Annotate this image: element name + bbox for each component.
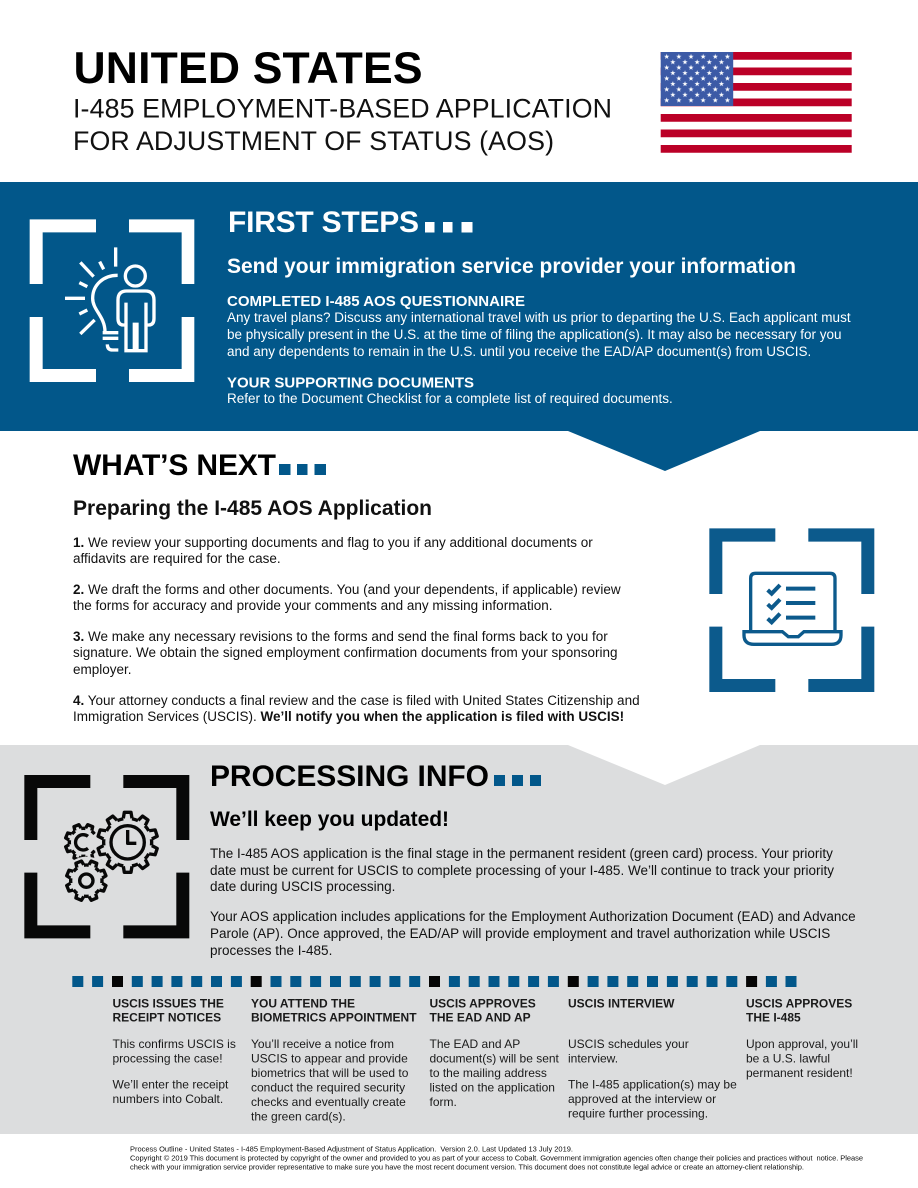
- text block: supporting documents: YOUR SUPPORTING DOCUMENTS: [227, 374, 474, 392]
- timeline step: EAD and AP approval: USCIS APPROVES: [430, 996, 536, 1010]
- timeline step: interview: [568, 996, 737, 1120]
- timeline step: biometrics appointment: biometrics that will be used to: [251, 1066, 409, 1080]
- timeline step: EAD and AP approval: form.: [430, 1095, 457, 1109]
- icon part: large clock gear: [94, 809, 161, 876]
- step 2: [73, 582, 621, 613]
- icon part: small upper gear: [65, 824, 101, 860]
- step 4: [73, 693, 640, 724]
- timeline step: interview: require further processing.: [568, 1106, 708, 1120]
- text block: questionnaire: Any travel plans? Discuss any international travel with us prior to departing the U.S. Each applicant must: [227, 310, 851, 325]
- timeline step: I-485 approval: [746, 996, 858, 1080]
- timeline step: receipt notices: This confirms USCIS is: [112, 1037, 236, 1051]
- timeline step: biometrics appointment: checks and eventually create: [251, 1095, 406, 1109]
- timeline step: interview: interview.: [568, 1052, 618, 1066]
- step 1: [73, 535, 593, 566]
- subtitle: I-485 EMPLOYMENT-BASED APPLICATION: [73, 94, 612, 124]
- step 4: 4. Your attorney conducts a final review and the case is filed with United States Citizenship and: [73, 693, 640, 708]
- footer disclaimer: check with your immigration service provider representative to make sure you have the most recent document version. This document does not constitute legal advice or create an attorney-client relationship.: [130, 1162, 804, 1172]
- timeline step: I-485 approval: Upon approval, you’ll: [746, 1037, 858, 1051]
- footer disclaimer: Process Outline - United States - I-485 Employment-Based Adjustment of Status Application. Version 2.0. Last Updated 13 July 2019.: [130, 1144, 573, 1154]
- step 4: Immigration Services (USCIS). We’ll notify you when the application is filed with USCIS!: [73, 709, 624, 724]
- panel: processing info: [0, 745, 918, 1134]
- icon: gears and clock: [24, 775, 189, 938]
- timeline step: receipt notices: RECEIPT NOTICES: [112, 1010, 221, 1024]
- step 2: the forms for accuracy and provide your comments and any missing information.: [73, 598, 552, 613]
- footer disclaimer: [130, 1144, 863, 1172]
- icon: laptop checklist: [709, 528, 874, 692]
- footer disclaimer: Copyright © 2019 This document is protected by copyright of the owner and provided to you as part of your access to Cobalt. Government immigration agencies often change their policies and practices without notice. Please: [130, 1154, 863, 1162]
- header: [73, 44, 852, 156]
- step 1: affidavits are required for the case.: [73, 551, 281, 566]
- text block: supporting documents: [227, 374, 673, 406]
- step 3: [73, 629, 618, 677]
- step 1: 1. We review your supporting documents and flag to you if any additional documents or: [73, 535, 593, 550]
- text block: final stage: The I-485 AOS application is the final stage in the permanent resident (green card) process. Your priority: [210, 846, 833, 861]
- panel: first steps: [0, 182, 918, 471]
- timeline step: biometrics appointment: conduct the required security: [251, 1080, 405, 1094]
- text block: EAD and AP: [210, 909, 856, 958]
- text block: EAD and AP: processes the I-485.: [210, 943, 332, 958]
- timeline step: biometrics appointment: the green card(s).: [251, 1110, 346, 1124]
- subtitle: [73, 94, 612, 156]
- text block: final stage: date must be current for USCIS to complete processing of your I-485. We’ll continue to track your priority: [210, 863, 834, 878]
- subheading: preparing application: Preparing the I-485 AOS Application: [73, 497, 432, 520]
- heading: first steps: FIRST STEPS: [228, 206, 419, 239]
- timeline step: biometrics appointment: YOU ATTEND THE: [251, 996, 355, 1010]
- heading: what's next: WHAT’S NEXT: [73, 449, 276, 482]
- text block: questionnaire: be physically present in the U.S. at the time of filing the application(s). It may also be necessary for you: [227, 327, 842, 342]
- timeline step: EAD and AP approval: [430, 996, 560, 1109]
- icon: lightbulb and person: [30, 219, 194, 382]
- timeline step: I-485 approval: THE I-485: [746, 1010, 801, 1024]
- timeline step: receipt notices: USCIS ISSUES THE: [112, 996, 224, 1010]
- timeline step: biometrics appointment: BIOMETRICS APPOINTMENT: [251, 1010, 417, 1024]
- timeline step: EAD and AP approval: listed on the application: [430, 1080, 555, 1094]
- text block: questionnaire: and any dependents to remain in the U.S. until you receive the EAD/AP document(s) from USCIS.: [227, 344, 811, 359]
- title: UNITED STATES: [74, 44, 422, 93]
- timeline step: receipt notices: [112, 996, 236, 1106]
- timeline step: interview: USCIS INTERVIEW: [568, 996, 675, 1010]
- timeline step: I-485 approval: be a U.S. lawful: [746, 1052, 830, 1066]
- timeline step: interview: The I-485 application(s) may be: [568, 1078, 737, 1092]
- timeline step: I-485 approval: USCIS APPROVES: [746, 996, 852, 1010]
- timeline step: biometrics appointment: [251, 996, 417, 1124]
- step 3: employer.: [73, 662, 132, 677]
- text block: final stage: date during USCIS processing.: [210, 879, 395, 894]
- timeline step: receipt notices: We’ll enter the receipt: [112, 1078, 229, 1092]
- text block: questionnaire: COMPLETED I-485 AOS QUESTIONNAIRE: [227, 293, 525, 310]
- timeline step: EAD and AP approval: The EAD and AP: [430, 1037, 520, 1051]
- panel: what's next: [73, 449, 874, 724]
- timeline step: I-485 approval: permanent resident!: [746, 1066, 853, 1080]
- text block: final stage: [210, 846, 834, 894]
- timeline step: receipt notices: numbers into Cobalt.: [112, 1092, 223, 1106]
- subtitle: FOR ADJUSTMENT OF STATUS (AOS): [73, 126, 554, 156]
- text block: EAD and AP: Your AOS application includes applications for the Employment Authorization Document (EAD) and Advance: [210, 909, 856, 924]
- timeline step: receipt notices: processing the case!: [112, 1052, 223, 1066]
- timeline step: interview: USCIS schedules your: [568, 1037, 689, 1051]
- timeline step: EAD and AP approval: THE EAD AND AP: [430, 1010, 531, 1024]
- timeline step: EAD and AP approval: to the mailing address: [430, 1066, 547, 1080]
- timeline step: biometrics appointment: You’ll receive a notice from: [251, 1037, 394, 1051]
- icon: US flag: [661, 52, 852, 153]
- step 3: 3. We make any necessary revisions to the forms and send the final forms back to you for: [73, 629, 608, 644]
- text block: EAD and AP: Parole (AP). Once approved, the EAD/AP will provide employment and travel authorization while USCIS: [210, 926, 830, 941]
- timeline markers: [72, 976, 797, 987]
- heading: processing info: PROCESSING INFO: [210, 760, 489, 793]
- step 2: 2. We draft the forms and other documents. You (and your dependents, if applicable) review: [73, 582, 621, 597]
- subheading: keep you updated: We’ll keep you updated!: [210, 808, 449, 831]
- text block: questionnaire: [227, 293, 851, 359]
- step 3: signature. We obtain the signed employment confirmation documents from your sponsoring: [73, 645, 618, 660]
- timeline step: biometrics appointment: USCIS to appear and provide: [251, 1052, 408, 1066]
- timeline step: EAD and AP approval: document(s) will be sent: [430, 1052, 560, 1066]
- timeline step: interview: approved at the interview or: [568, 1092, 716, 1106]
- text block: supporting documents: Refer to the Document Checklist for a complete list of required documents.: [227, 391, 673, 406]
- icon part: lower gear: [62, 857, 110, 905]
- subheading: send information: Send your immigration service provider your information: [227, 255, 796, 278]
